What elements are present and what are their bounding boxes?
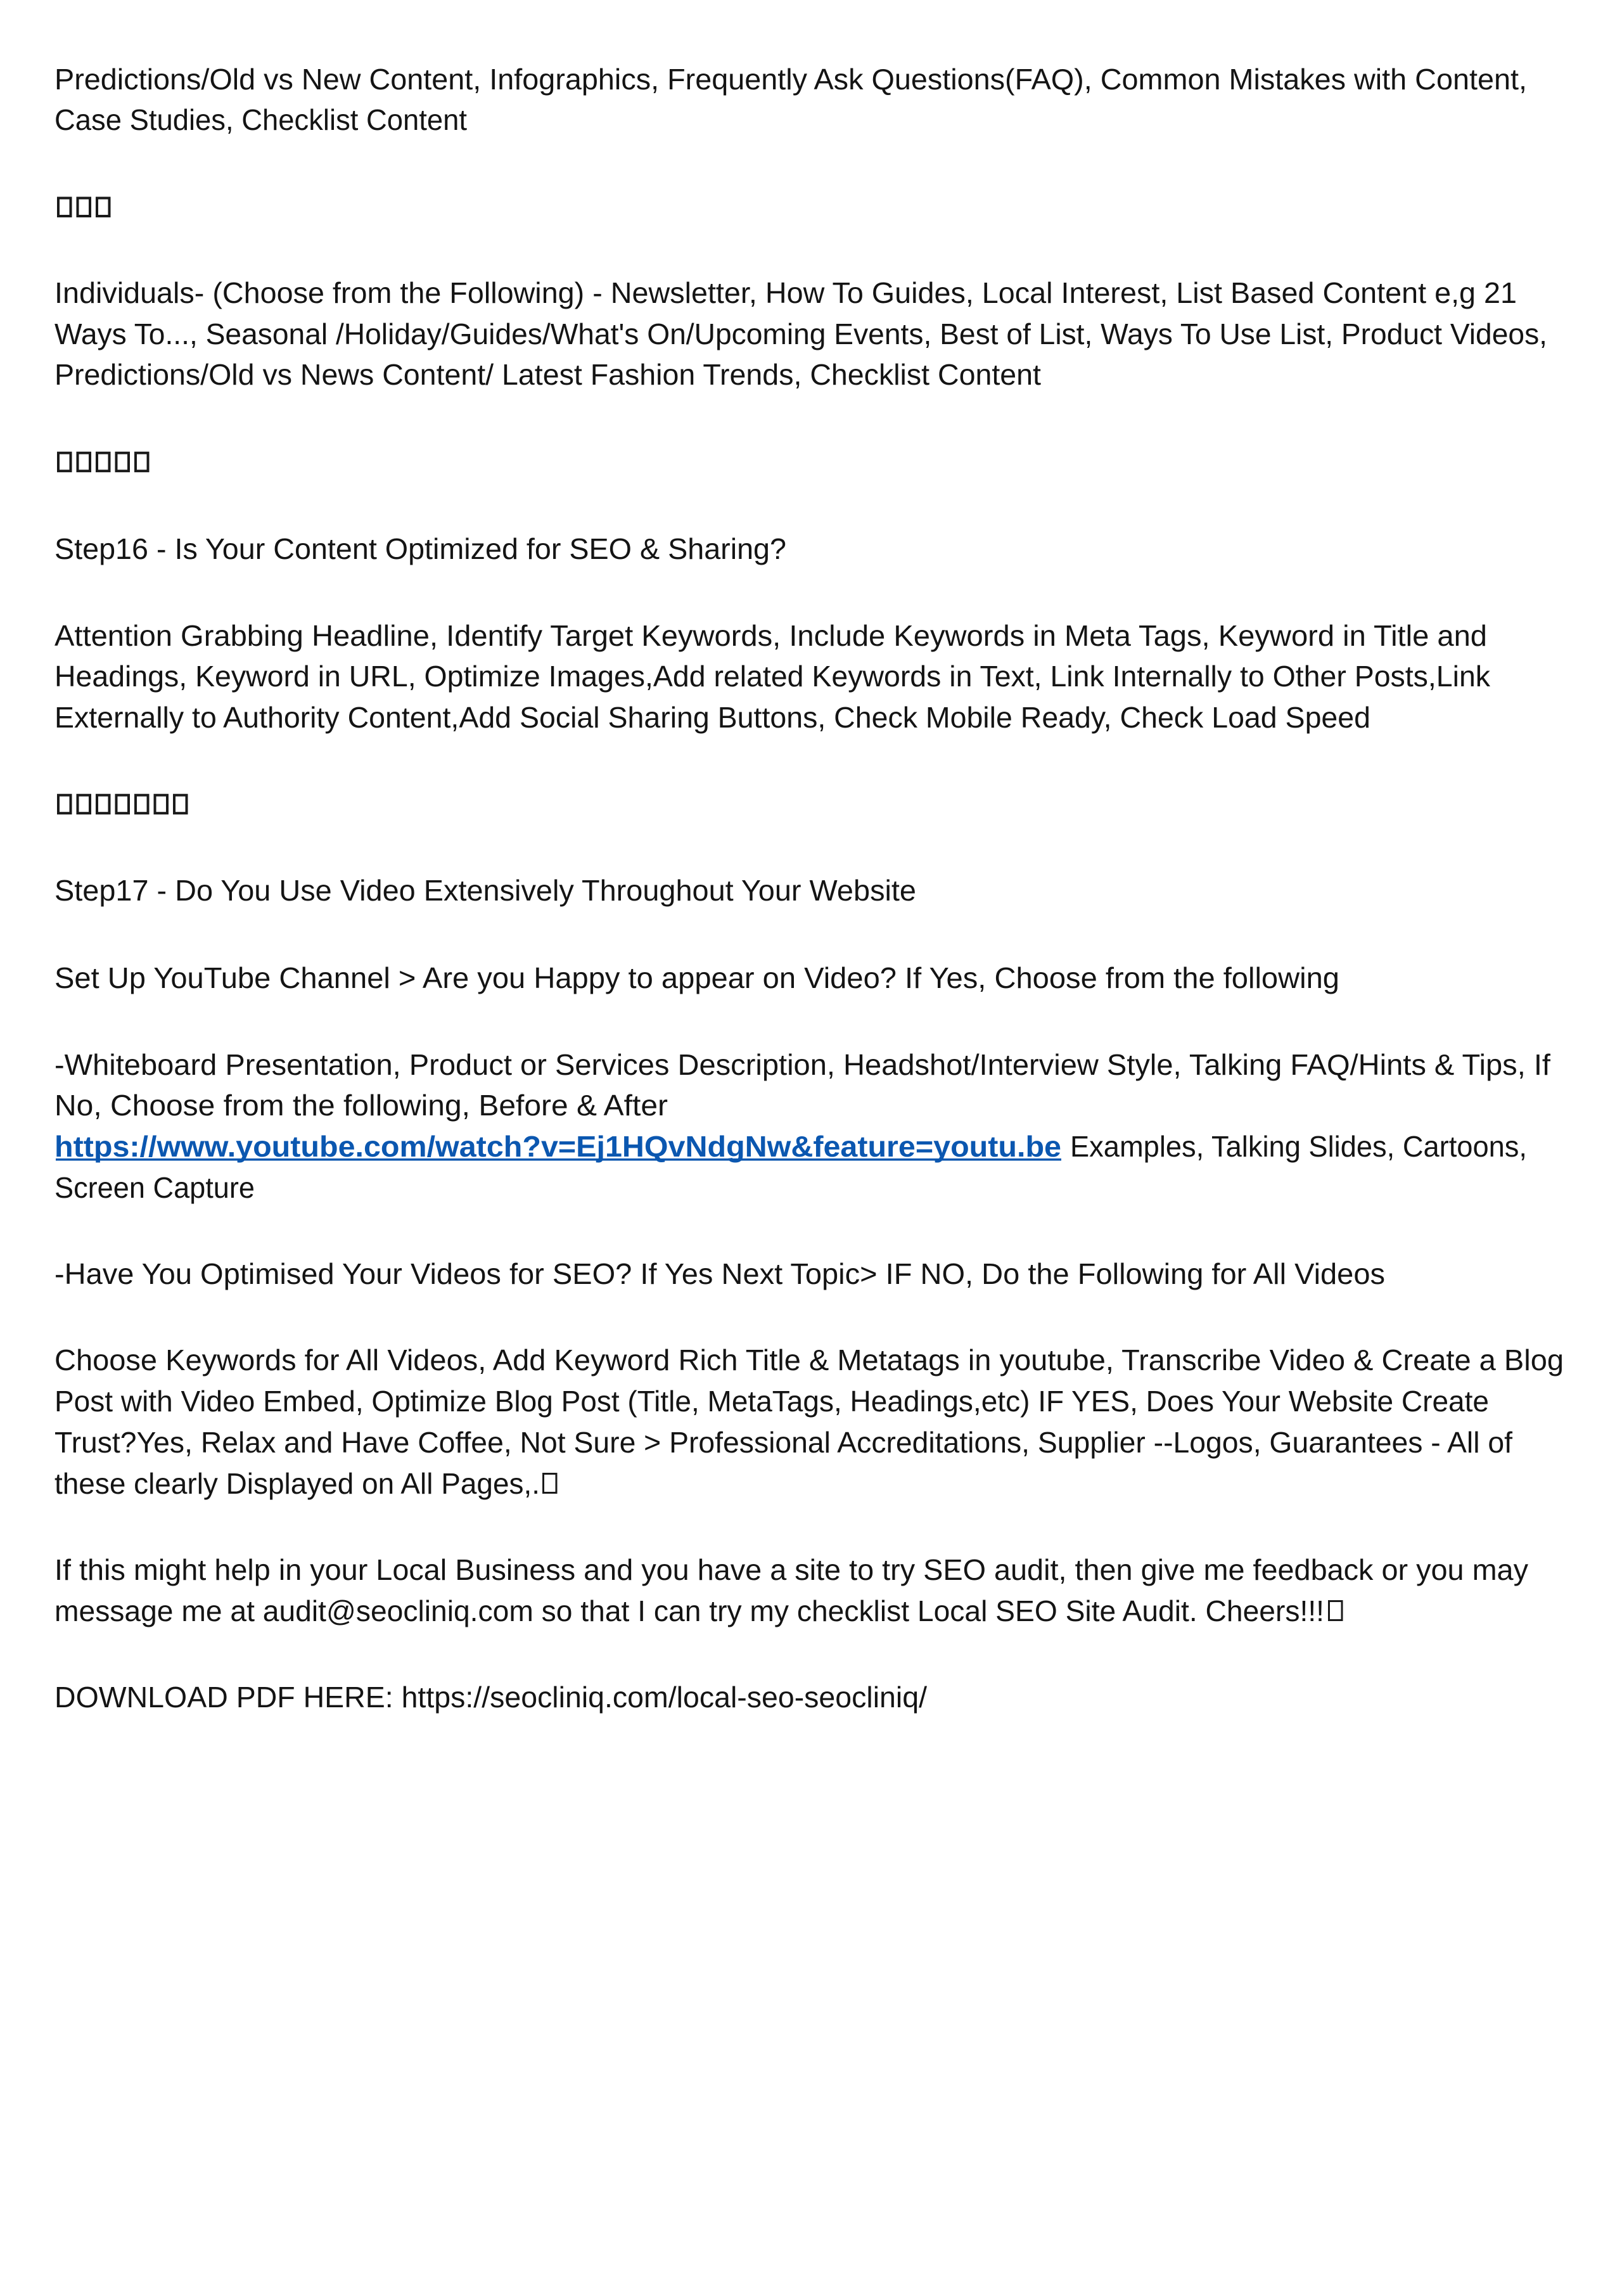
icon: missing glyph boxes (5) (58, 453, 148, 471)
text block: youtube channel question: Set Up YouTube Channel > Are you Happy to appear on Video? If Yes, Choose from the following (54, 961, 1339, 994)
text block: video styles with link: No, Choose from the following, Before & After (54, 1089, 668, 1122)
text block: video keyword steps: Trust?Yes, Relax and Have Coffee, Not Sure > Professional Accreditations, Supplier --Logos, Guarantees - All of (54, 1426, 1512, 1459)
text block: step 16 details: Externally to Authority Content,Add Social Sharing Buttons, Check Mobile Ready, Check Load Speed (54, 701, 1370, 734)
text block: video styles with link: Examples, Talking Slides, Cartoons, (1070, 1130, 1527, 1163)
heading: step 17: Step17 - Do You Use Video Extensively Throughout Your Website (54, 874, 916, 907)
text block: video styles with link: -Whiteboard Presentation, Product or Services Description, Headshot/Interview Style, Talking FAQ/Hints & Tips, If (54, 1048, 1550, 1081)
text block: video keyword steps (54, 1344, 1564, 1500)
text block: feedback message (54, 1553, 1528, 1627)
text block: individuals content list: Predictions/Old vs News Content/ Latest Fashion Trends, Checklist Content (54, 358, 1041, 391)
text block: video styles with link: Screen Capture (54, 1171, 255, 1204)
text block: individuals content list (54, 276, 1547, 391)
text block: content types list (54, 63, 1527, 136)
text block: video SEO question: -Have You Optimised Your Videos for SEO? If Yes Next Topic> IF NO, Do the Following for All Videos (54, 1257, 1385, 1290)
text block: content types list: Case Studies, Checklist Content (54, 103, 467, 136)
text block: download line: DOWNLOAD PDF HERE: https://seocliniq.com/local-seo-seocliniq/ (54, 1681, 927, 1714)
icon: missing glyph boxes (7) (58, 795, 186, 813)
text block: step 16 details: Headings, Keyword in URL, Optimize Images,Add related Keywords in Text, Link Internally to Other Posts,Link (54, 660, 1491, 693)
text block: step 16 details: Attention Grabbing Headline, Identify Target Keywords, Include Keywords in Meta Tags, Keyword in Title and (54, 619, 1487, 652)
text block: step 16 details (54, 619, 1491, 734)
text block: video keyword steps: Post with Video Embed, Optimize Blog Post (Title, MetaTags, Headings,etc) IF YES, Does Your Website Create (54, 1385, 1489, 1418)
icon: missing glyph boxes (3) (58, 198, 109, 216)
text block: video styles with link: https://www.youtube.com/watch?v=Ej1HQvNdgNw&feature=youtu.be (54, 1130, 1061, 1163)
text block: feedback message: message me at audit@seocliniq.com so that I can try my checklist Local SEO Site Audit. Cheers!!! (54, 1594, 1324, 1627)
text block: individuals content list: Ways To..., Seasonal /Holiday/Guides/What's On/Upcoming Events, Best of List, Ways To Use List, Product Videos, (54, 317, 1547, 350)
text block: content types list: Predictions/Old vs New Content, Infographics, Frequently Ask Questions(FAQ), Common Mistakes with Content, (54, 63, 1527, 96)
text block: individuals content list: Individuals- (Choose from the Following) - Newsletter, How To Guides, Local Interest, List Based Content e,g 21 (54, 276, 1517, 309)
text block: video keyword steps: Choose Keywords for All Videos, Add Keyword Rich Title & Metatags in youtube, Transcribe Video & Create a Blog (54, 1344, 1564, 1376)
text block: video styles with link (54, 1048, 1550, 1204)
text block: feedback message: If this might help in your Local Business and you have a site to try SEO audit, then give me feedback or you may (54, 1553, 1528, 1586)
heading: step 16: Step16 - Is Your Content Optimized for SEO & Sharing? (54, 532, 786, 565)
text block: video keyword steps: these clearly Displayed on All Pages,. (54, 1467, 540, 1500)
